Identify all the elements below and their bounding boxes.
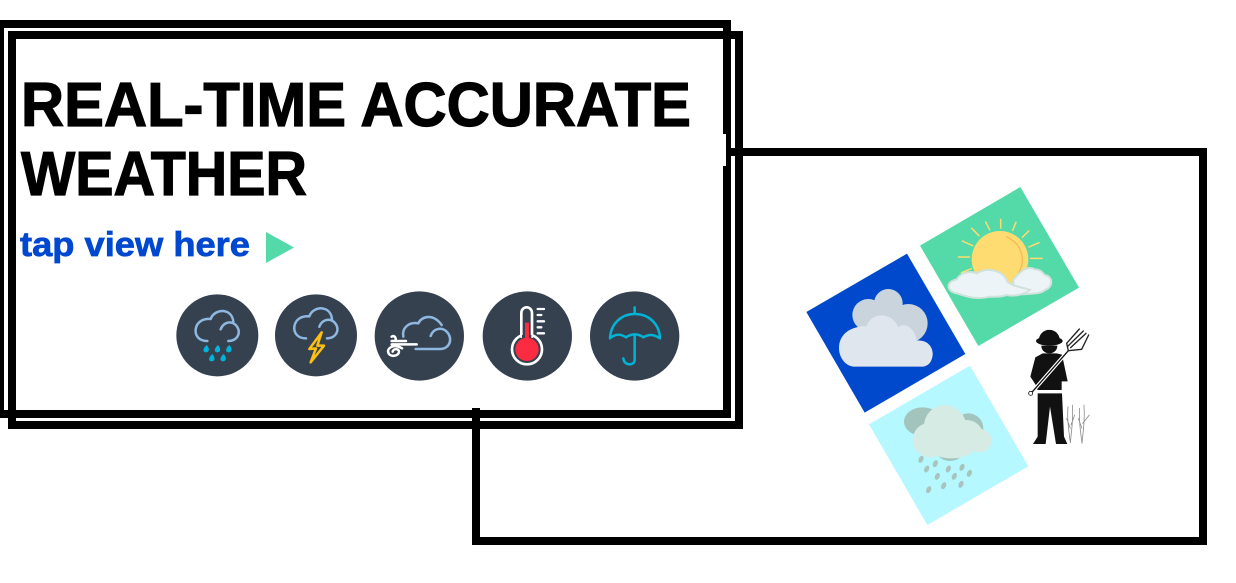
tile: cloudy on blue (806, 254, 965, 413)
link text: tap view here: tap view here (20, 226, 250, 264)
weather icon row (176, 291, 679, 381)
figure: farmer with pitchfork (1029, 329, 1089, 444)
right frame left-edge stub (472, 408, 480, 430)
title: WEATHER (21, 140, 307, 209)
panel: outer offset title frame (12, 35, 739, 425)
icon: thunder cloud (275, 294, 357, 376)
tile: rain cloud on cyan (869, 366, 1028, 525)
title (21, 71, 691, 209)
panel: title frame (0, 24, 727, 414)
panel: right frame (476, 152, 1203, 541)
weather illustration group (806, 187, 1089, 525)
icon: thermometer (483, 291, 572, 381)
icon: rain cloud (176, 294, 258, 376)
right frame top line join (723, 134, 746, 166)
icon: play arrow (266, 232, 294, 263)
icon: umbrella (590, 291, 679, 381)
icon: windy cloud (375, 291, 464, 381)
title panel white backing (0, 20, 743, 429)
title: REAL-TIME ACCURATE (21, 71, 691, 140)
tile: sun and cloud on green (920, 187, 1079, 346)
icon: grass tufts (1067, 405, 1089, 443)
